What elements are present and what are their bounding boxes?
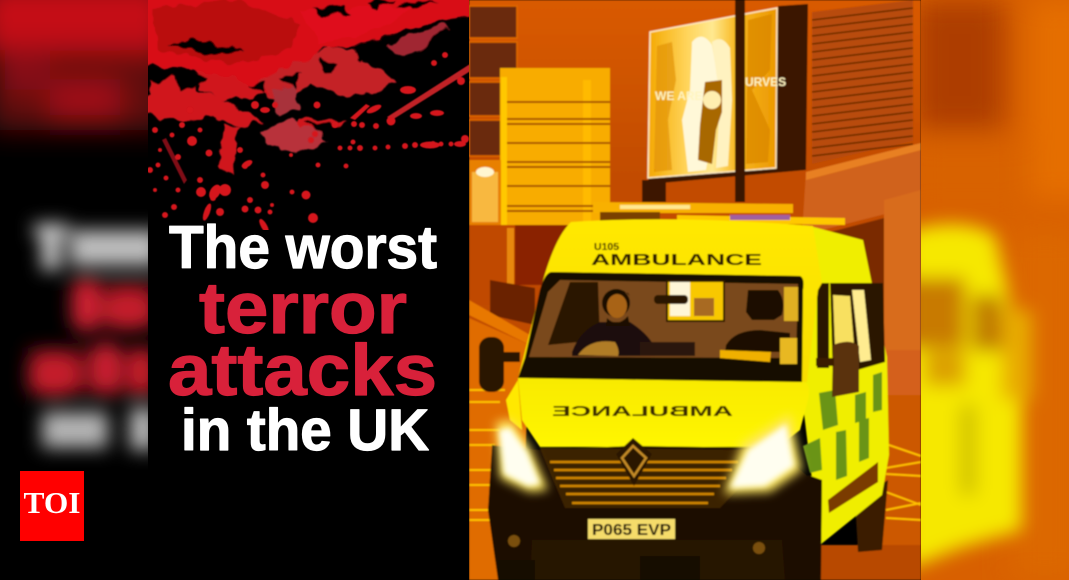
driver [572,322,660,356]
light bar [593,202,845,225]
dash items [640,342,695,356]
side stripe [828,462,878,513]
left headlight [496,420,548,492]
title line 2: terror [199,269,407,349]
toi logo [20,471,84,541]
illuminated billboard [648,8,786,178]
bumper [488,445,812,580]
fog lights [508,535,520,547]
shutter [812,0,913,164]
front wheel [530,560,535,580]
roof lettering: U105 [594,241,619,253]
illuminated billboard: WE ARE [655,89,703,103]
roof lettering [591,242,762,266]
windscreen [518,272,804,382]
roof [518,219,822,382]
blurred left panel [0,0,148,464]
grille [540,447,742,508]
rear wheel [855,480,888,552]
side window [830,283,885,377]
step and front wheel [807,474,823,580]
right railing wall [885,350,921,395]
bonnet lettering: AMBULANCE [552,403,733,420]
right headlight [724,414,802,494]
road [469,318,530,580]
blood splatter [140,0,480,234]
red smear and splash clusters [140,0,480,175]
number plate: P065 EVP [592,522,671,539]
title line 4: in the UK [181,398,429,463]
icon: renault logo [616,438,652,486]
road sign back [500,68,610,228]
title line 3: attacks [168,331,437,411]
right wing mirror [816,342,859,397]
left wing mirror [479,337,520,392]
droplets [147,52,472,234]
bonnet [518,378,809,447]
billboard housing [648,4,808,184]
side panel [800,226,889,545]
concrete ledge and lower wall [802,143,921,235]
title line 1: The worst [169,214,437,281]
mirror & rear view [666,280,725,322]
building wall [469,0,921,350]
lower wall left and railing [469,224,542,290]
blurred right panel [905,0,1069,580]
ambulance [479,219,889,580]
glass facade panels [469,6,517,156]
title [168,214,437,463]
side checker markings [803,372,882,480]
toi logo: TOI [24,485,80,520]
panel: photo of ambulance at night [469,0,921,580]
panel: central black column [148,0,469,580]
passenger seat [746,290,783,320]
roof lettering: AMBULANCE [591,252,763,269]
lit doorway [469,160,501,230]
street pole [735,0,745,202]
illuminated billboard: URVES [745,75,786,89]
